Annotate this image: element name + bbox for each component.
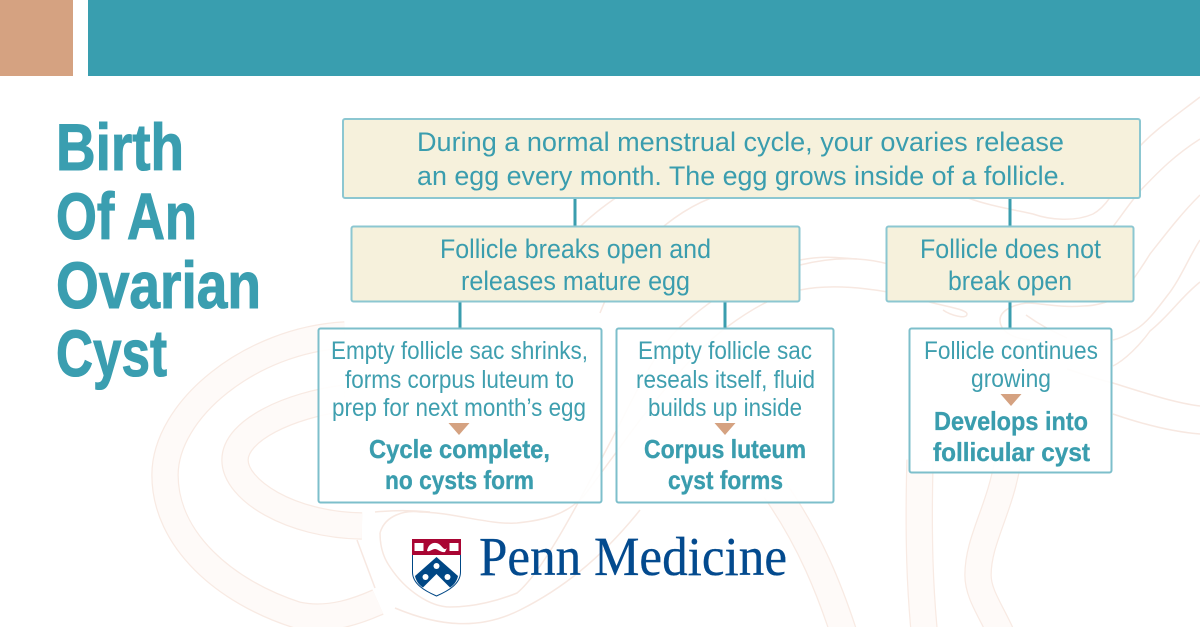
title: Ovarian	[56, 248, 261, 322]
panel: normal menstrual cycle: an egg every month. The egg grows inside of a follicle.	[417, 161, 1066, 191]
panel: follicular cyst: Develops into	[934, 406, 1088, 436]
connector lines	[460, 198, 1010, 328]
panel: follicle breaks open: releases mature egg	[461, 266, 690, 296]
title: Cyst	[56, 316, 167, 390]
panel: follicle does not break open	[886, 226, 1134, 302]
icon: Penn shield	[412, 539, 461, 596]
panel: normal menstrual cycle	[343, 119, 1140, 198]
panel: cycle complete: Cycle complete,	[369, 434, 550, 464]
header bar: teal band	[88, 0, 1200, 76]
panel: follicle does not break open: Follicle does not	[920, 234, 1101, 264]
title: Of An	[56, 179, 197, 253]
arrow: down triangle	[448, 423, 470, 435]
header bar: tan block	[0, 0, 73, 76]
panel: cycle complete	[318, 328, 602, 502]
arrow: down triangle	[714, 423, 736, 435]
panel: cycle complete: forms corpus luteum to	[345, 366, 574, 394]
panel: corpus luteum cyst: cyst forms	[668, 465, 783, 495]
panel: follicle does not break open: break open	[948, 266, 1072, 296]
logo: Penn Medicine	[412, 526, 787, 596]
panel: corpus luteum cyst: reseals itself, fluid	[636, 366, 815, 394]
panel: follicular cyst: follicular cyst	[933, 437, 1090, 467]
panel: cycle complete: prep for next month’s egg	[332, 394, 586, 422]
panel: follicular cyst: Follicle continues	[924, 337, 1098, 365]
panel: follicle breaks open	[352, 226, 800, 302]
background pattern	[165, 97, 1200, 627]
title	[56, 110, 261, 390]
panel: cycle complete: Empty follicle sac shrinks,	[331, 337, 588, 365]
panel: normal menstrual cycle: During a normal menstrual cycle, your ovaries release	[417, 127, 1064, 157]
logo: Penn Medicine: Penn Medicine	[479, 526, 787, 587]
panel: follicular cyst	[910, 328, 1112, 472]
panel: follicular cyst: growing	[971, 365, 1051, 393]
panel: corpus luteum cyst: builds up inside	[648, 394, 802, 422]
panel: corpus luteum cyst: Empty follicle sac	[638, 337, 812, 365]
panel: cycle complete: no cysts form	[385, 465, 534, 495]
panel: corpus luteum cyst	[616, 328, 834, 502]
panel: corpus luteum cyst: Corpus luteum	[644, 434, 806, 464]
panel: follicle breaks open: Follicle breaks open and	[440, 234, 711, 264]
arrow: down triangle	[1000, 394, 1022, 406]
title: Birth	[56, 110, 184, 184]
